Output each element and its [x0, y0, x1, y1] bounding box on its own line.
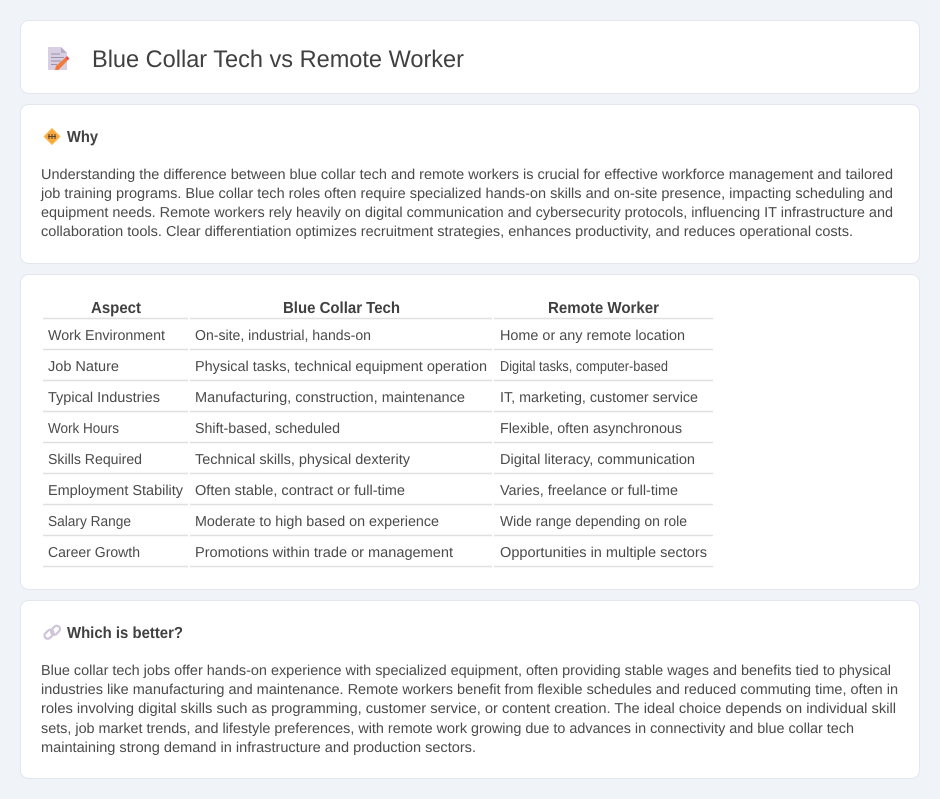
- text block: why paragraph: Understanding the difference between blue collar tech and remote workers is crucial for effective workforce management and tailored: [41, 167, 893, 183]
- title: Blue Collar Tech vs Remote Worker: [92, 46, 464, 73]
- row: job nature: Physical tasks, technical equipment operation: [195, 359, 487, 375]
- row: typical industries: [43, 390, 713, 412]
- icon: diamond road sign: [44, 128, 60, 144]
- table header: [43, 300, 713, 318]
- row: skills required: Digital literacy, communication: [500, 452, 695, 468]
- row: employment stability: Varies, freelance or full-time: [500, 483, 678, 499]
- row: work hours: Work Hours: [48, 421, 119, 437]
- row: work hours: Shift-based, scheduled: [195, 421, 340, 437]
- row: work hours: Flexible, often asynchronous: [500, 421, 682, 437]
- text block: why paragraph: collaboration tools. Clear differentiation optimizes recruitment strategies, enhances productivity, and reduces operational costs.: [41, 224, 853, 240]
- text block: which is better paragraph: [41, 663, 898, 756]
- row: salary range: Moderate to high based on experience: [195, 514, 439, 530]
- row: career growth: Opportunities in multiple sectors: [500, 545, 707, 561]
- table header: Aspect: [91, 300, 142, 317]
- row: skills required: Technical skills, physical dexterity: [195, 452, 411, 468]
- row: typical industries: IT, marketing, customer service: [500, 390, 698, 406]
- text block: which is better paragraph: maintaining strong demand in infrastructure and production sectors.: [41, 740, 476, 756]
- row: job nature: Job Nature: [48, 359, 119, 375]
- row: work environment: On-site, industrial, hands-on: [195, 328, 371, 344]
- table header: Remote Worker: [548, 300, 659, 317]
- row: employment stability: Often stable, contract or full-time: [195, 483, 405, 499]
- text block: which is better paragraph: Blue collar tech jobs offer hands-on experience with specialized equipment, often providing stable wages and benefits tied to physical: [41, 663, 891, 679]
- text block: which is better paragraph: industries like manufacturing and maintenance. Remote workers benefit from flexible schedules and reduced commuting time, often in: [41, 682, 898, 698]
- row: career growth: Promotions within trade or management: [195, 545, 453, 561]
- text block: why paragraph: [40, 167, 893, 240]
- icon: document with pencil: [48, 47, 70, 70]
- row: salary range: [43, 514, 713, 536]
- icon: link: [43, 624, 61, 640]
- row: typical industries: Typical Industries: [48, 390, 160, 406]
- row: career growth: [43, 545, 713, 566]
- row: career growth: Career Growth: [48, 545, 140, 561]
- panel: why: [20, 104, 920, 264]
- text block: why paragraph: job training programs. Blue collar tech roles often require specialized hands-on skills and on-site presence, impacting scheduling and: [40, 186, 893, 202]
- row: work environment: Home or any remote location: [500, 328, 685, 344]
- text block: which is better paragraph: roles involving digital skills such as programming, customer service, or content creation. The ideal choice depends on individual skill: [41, 701, 896, 717]
- table header: Blue Collar Tech: [283, 300, 400, 317]
- row: skills required: Skills Required: [48, 452, 142, 468]
- row: job nature: Digital tasks, computer-based: [500, 359, 668, 375]
- panel: which is better: [20, 600, 920, 778]
- row: salary range: Salary Range: [48, 514, 131, 530]
- heading: why: Why: [67, 129, 98, 146]
- text block: which is better paragraph: sets, job market trends, and lifestyle preferences, with remote work growing due to advances in connectivity and blue collar tech: [41, 721, 854, 737]
- row: job nature: [43, 359, 713, 380]
- row: employment stability: Employment Stability: [48, 483, 184, 499]
- row: work environment: Work Environment: [48, 328, 165, 344]
- row: typical industries: Manufacturing, construction, maintenance: [195, 390, 465, 406]
- row: skills required: [43, 452, 713, 474]
- row: work hours: [43, 421, 713, 442]
- heading: which is better: Which is better?: [67, 625, 183, 642]
- panel: header: [20, 20, 920, 94]
- row: salary range: Wide range depending on role: [500, 514, 687, 530]
- text block: why paragraph: equipment needs. Remote workers rely heavily on digital communication and cybersecurity protocols, influencing IT infrastructure and: [41, 205, 893, 221]
- panel: comparison table: [20, 274, 920, 590]
- row: employment stability: [43, 483, 713, 504]
- row: work environment: [43, 328, 713, 350]
